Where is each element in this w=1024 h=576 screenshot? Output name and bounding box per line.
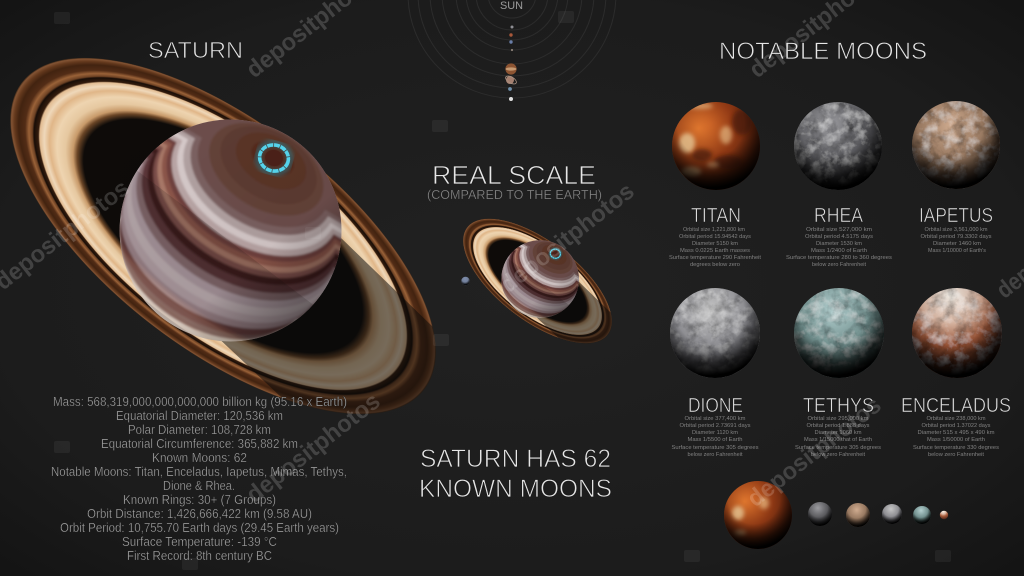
heading: saturn has 62 known moons: KNOWN MOONS xyxy=(419,475,612,503)
moon block: rhea: Orbital period 4.5175 days xyxy=(805,234,873,240)
moon block: rhea: below zero Fahrenheit xyxy=(812,262,866,268)
text block: saturn facts: Surface Temperature: -139 °C xyxy=(122,535,277,549)
text block: saturn facts: Known Moons: 62 xyxy=(152,451,247,465)
text block: saturn facts: Orbit Period: 10,755.70 Earth days (29.45 Earth years) xyxy=(60,521,339,535)
moon block: enceladus: Mass 1/50000 of Earth xyxy=(927,437,985,443)
moon block: rhea: RHEA xyxy=(814,205,864,227)
text block: saturn facts: Mass: 568,319,000,000,000,000 billion kg (95.16 x Earth) xyxy=(53,395,347,409)
moon: enceladus xyxy=(912,288,1002,378)
heading: real scale: REAL SCALE xyxy=(432,160,596,190)
moon block: iapetus: Mass 1/10000 of Earth's xyxy=(928,248,986,254)
moon block: dione: Orbital period 2.73691 days xyxy=(680,423,751,429)
moon block: enceladus: Surface temperature 330 degrees xyxy=(913,445,999,451)
solar system diagram xyxy=(408,0,616,101)
text block: saturn facts: Equatorial Diameter: 120,536 km xyxy=(116,409,283,423)
moon block: enceladus: Diameter 515 x 495 x 490 km xyxy=(918,430,995,436)
small saturn to scale xyxy=(443,196,632,366)
moon block: enceladus: Orbital period 1.37022 days xyxy=(922,423,991,429)
moon block: enceladus: ENCELADUS xyxy=(901,395,1011,417)
moon: titan xyxy=(672,102,760,190)
moon block: titan: Mass 0.0225 Earth masses xyxy=(680,248,750,254)
moon block: rhea xyxy=(786,205,892,268)
text block: saturn facts: Orbit Distance: 1,426,666,422 km (9.58 AU) xyxy=(87,507,312,521)
subheading: compared to the earth: (COMPARED TO THE EARTH) xyxy=(427,187,602,202)
moon block: tethys: Orbital period 1.888 days xyxy=(806,423,870,429)
moon: rhea xyxy=(794,102,882,190)
moon block: titan: Orbital size 1,221,800 km xyxy=(683,227,745,233)
text block: saturn facts: Notable Moons: Titan, Enceladus, Iapetus, Mimas, Tethys, xyxy=(51,465,347,479)
moon block: titan: degrees below zero xyxy=(690,262,740,268)
moon block: enceladus: Orbital size 238,000 km xyxy=(926,416,986,422)
watermarks: depositphotos xyxy=(742,392,887,513)
moon block: titan: TITAN xyxy=(691,205,741,227)
heading: saturn has 62 known moons xyxy=(419,445,612,503)
title: notable moons: NOTABLE MOONS xyxy=(719,38,927,65)
moon block: tethys: Mass 1/15000 that of Earth xyxy=(804,437,872,443)
moon block: rhea: Mass 1/2400 of Earth xyxy=(811,248,867,254)
moon block: titan: Surface temperature 290 Fahrenheit xyxy=(669,255,761,261)
moon block: iapetus: Orbital period 79.3302 days xyxy=(920,234,992,240)
moon block: titan: Diameter 5150 km xyxy=(692,241,738,247)
moon block: dione xyxy=(672,395,759,458)
text block: saturn facts: Polar Diameter: 108,728 km xyxy=(128,423,271,437)
moon size comparison row xyxy=(724,481,948,549)
moon block: titan xyxy=(669,205,761,268)
text block: saturn facts: Equatorial Circumference: 365,882 km xyxy=(101,437,298,451)
moon block: iapetus xyxy=(919,205,993,254)
moon block: titan: Orbital period 15.94542 days xyxy=(679,234,751,240)
moon: iapetus xyxy=(912,101,1000,189)
text block: saturn facts: Known Rings: 30+ (7 Groups) xyxy=(123,493,276,507)
moon block: tethys xyxy=(795,395,881,458)
moon block: dione: Diameter 1120 km xyxy=(692,430,738,436)
text block: saturn facts: First Record: 8th century BC xyxy=(127,549,272,563)
label: sun: SUN xyxy=(500,0,523,12)
moon block: tethys: below zero Fahrenheit xyxy=(811,452,865,458)
moon block: rhea: Diameter 1530 km xyxy=(816,241,862,247)
moon block: tethys: Orbital size 295,000 km xyxy=(808,416,869,422)
moon block: tethys: TETHYS xyxy=(803,395,874,417)
moon block: iapetus: IAPETUS xyxy=(919,205,993,227)
watermarks: depositphotos xyxy=(241,388,386,509)
moon block: rhea: Surface temperature 280 to 360 degrees xyxy=(786,255,892,261)
moon block: dione: Surface temperature 305 degrees xyxy=(672,445,759,451)
moon block: iapetus: Diameter 1460 km xyxy=(933,241,981,247)
moon: tethys xyxy=(794,288,884,378)
moon block: dione: below zero Fahrenheit xyxy=(688,452,743,458)
moon block: enceladus xyxy=(901,395,1011,458)
moon block: dione: Orbital size 377,400 km xyxy=(684,416,746,422)
moon: dione xyxy=(670,288,760,378)
text block: saturn facts: Dione & Rhea. xyxy=(163,479,235,493)
moon block: dione: DIONE xyxy=(688,395,743,417)
moon block: enceladus: below zero Fahrenheit xyxy=(928,452,984,458)
moon block: tethys: Diameter 1060 km xyxy=(814,430,862,436)
moon block: rhea: Orbital size 527,000 km xyxy=(806,227,872,233)
text block: saturn facts xyxy=(51,395,347,563)
watermarks: depositphotos xyxy=(495,178,640,299)
moon block: tethys: Surface temperature 305 degrees xyxy=(795,445,881,451)
icon: earth for scale xyxy=(461,277,470,285)
heading: saturn has 62 known moons: SATURN HAS 62 xyxy=(420,445,611,473)
moon block: iapetus: Orbital size 3,561,000 km xyxy=(924,227,988,233)
moon block: dione: Mass 1/5500 of Earth xyxy=(688,437,742,443)
panel: large saturn xyxy=(0,0,493,480)
title: saturn: SATURN xyxy=(148,37,243,63)
